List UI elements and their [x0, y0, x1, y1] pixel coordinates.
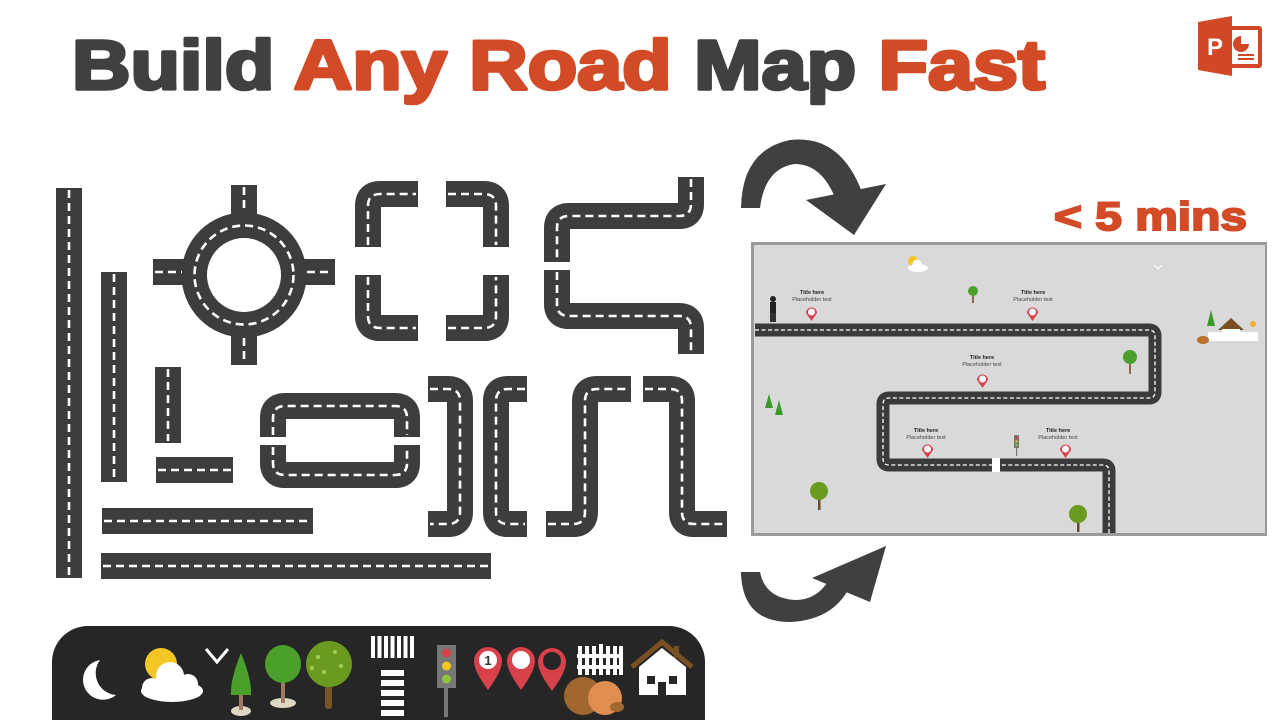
map labels and pins: Placeholder text	[1013, 297, 1053, 303]
icon: traffic light	[437, 645, 456, 717]
road: corner pieces	[368, 194, 496, 328]
road: S pieces	[557, 177, 691, 354]
map road	[755, 330, 1155, 533]
map labels and pins: Placeholder text	[792, 297, 832, 303]
icon: map pins: 1	[484, 653, 492, 668]
map labels and pins: Title here	[1046, 428, 1070, 434]
icon: moon	[83, 660, 116, 700]
icon: house	[632, 642, 692, 695]
road: short vertical	[155, 367, 181, 443]
icon: chevron	[206, 649, 228, 662]
road: long horizontal	[101, 553, 491, 579]
icon: rocks	[564, 677, 624, 715]
icon: powerpoint logo: P	[1207, 34, 1223, 61]
road: medium horizontal	[102, 508, 313, 534]
arrow: bottom curved	[741, 546, 886, 622]
map labels and pins: Title here	[1021, 290, 1045, 296]
map labels and pins: Title here	[800, 290, 824, 296]
icon: pine tree	[231, 653, 251, 716]
panel: icon tray	[52, 626, 705, 720]
map labels and pins: Title here	[914, 428, 938, 434]
icon: map pins	[474, 647, 566, 691]
icon: sun and cloud	[141, 648, 203, 702]
icon: round tree	[265, 645, 301, 708]
title: Build Any Road Map Fast	[72, 26, 1045, 104]
road: loop pieces	[273, 406, 407, 475]
road: medium vertical	[101, 272, 127, 482]
map labels and pins: Placeholder text	[1038, 435, 1078, 441]
road pieces	[69, 177, 727, 578]
map labels and pins: Placeholder text	[962, 362, 1002, 368]
icon: crosswalk	[371, 636, 414, 716]
icon: fence	[577, 644, 623, 675]
road: bracket pieces	[428, 389, 727, 524]
panel: road map screenshot	[751, 242, 1267, 536]
road: roundabout	[153, 185, 335, 365]
road: short horizontal	[156, 457, 233, 483]
map decorations	[765, 256, 1258, 532]
arrow: top curved	[741, 139, 886, 235]
road: long vertical	[56, 188, 82, 578]
icon: leafy tree	[306, 641, 352, 709]
map labels and pins: Title here	[970, 355, 994, 361]
map labels and pins	[792, 290, 1078, 458]
icon: powerpoint logo	[1198, 16, 1262, 76]
map labels and pins: Placeholder text	[906, 435, 946, 441]
time label: < 5 mins	[1054, 195, 1247, 239]
